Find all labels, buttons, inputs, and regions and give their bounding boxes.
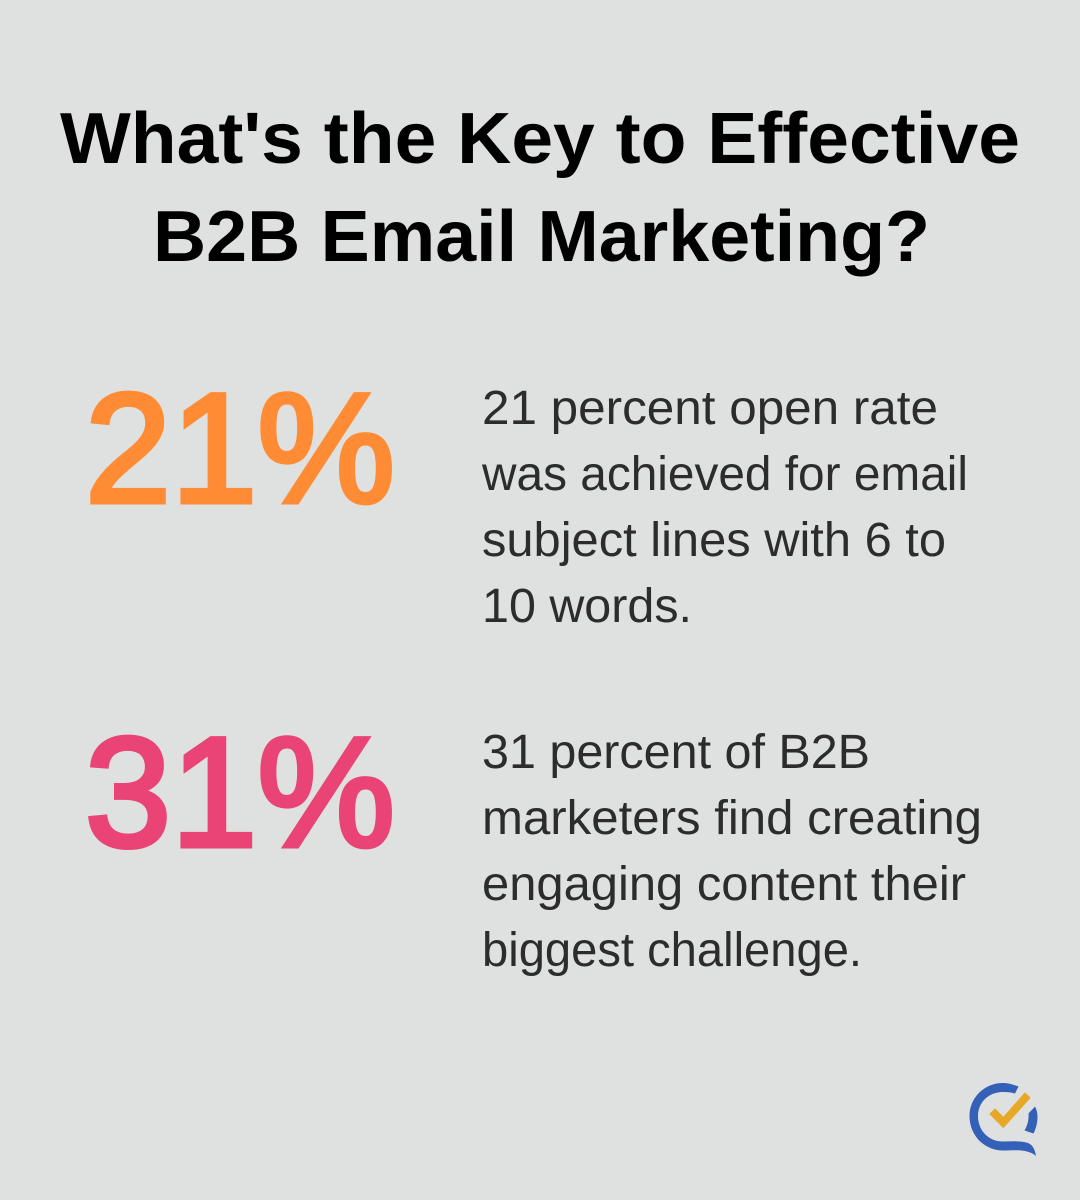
- title: B2B Email Marketing?: [153, 197, 930, 277]
- stat: 21%: 21%: [85, 362, 395, 536]
- text block: content challenge: [482, 726, 982, 977]
- text block: content challenge: engaging content their: [482, 858, 966, 911]
- title: [60, 99, 1020, 277]
- title: What's the Key to Effective: [60, 99, 1020, 179]
- stat: 31%: 31%: [85, 706, 395, 880]
- text block: content challenge: biggest challenge.: [482, 924, 862, 977]
- text block: open rate: 10 words.: [482, 580, 692, 633]
- text block: content challenge: 31 percent of B2B: [482, 726, 870, 779]
- text block: open rate: 21 percent open rate: [482, 382, 938, 435]
- text block: open rate: subject lines with 6 to: [482, 514, 946, 567]
- text block: open rate: [481, 382, 968, 633]
- text block: open rate: was achieved for email: [481, 448, 968, 501]
- icon: logo speech bubble with check: [970, 1083, 1038, 1156]
- text block: content challenge: marketers find creating: [482, 792, 982, 845]
